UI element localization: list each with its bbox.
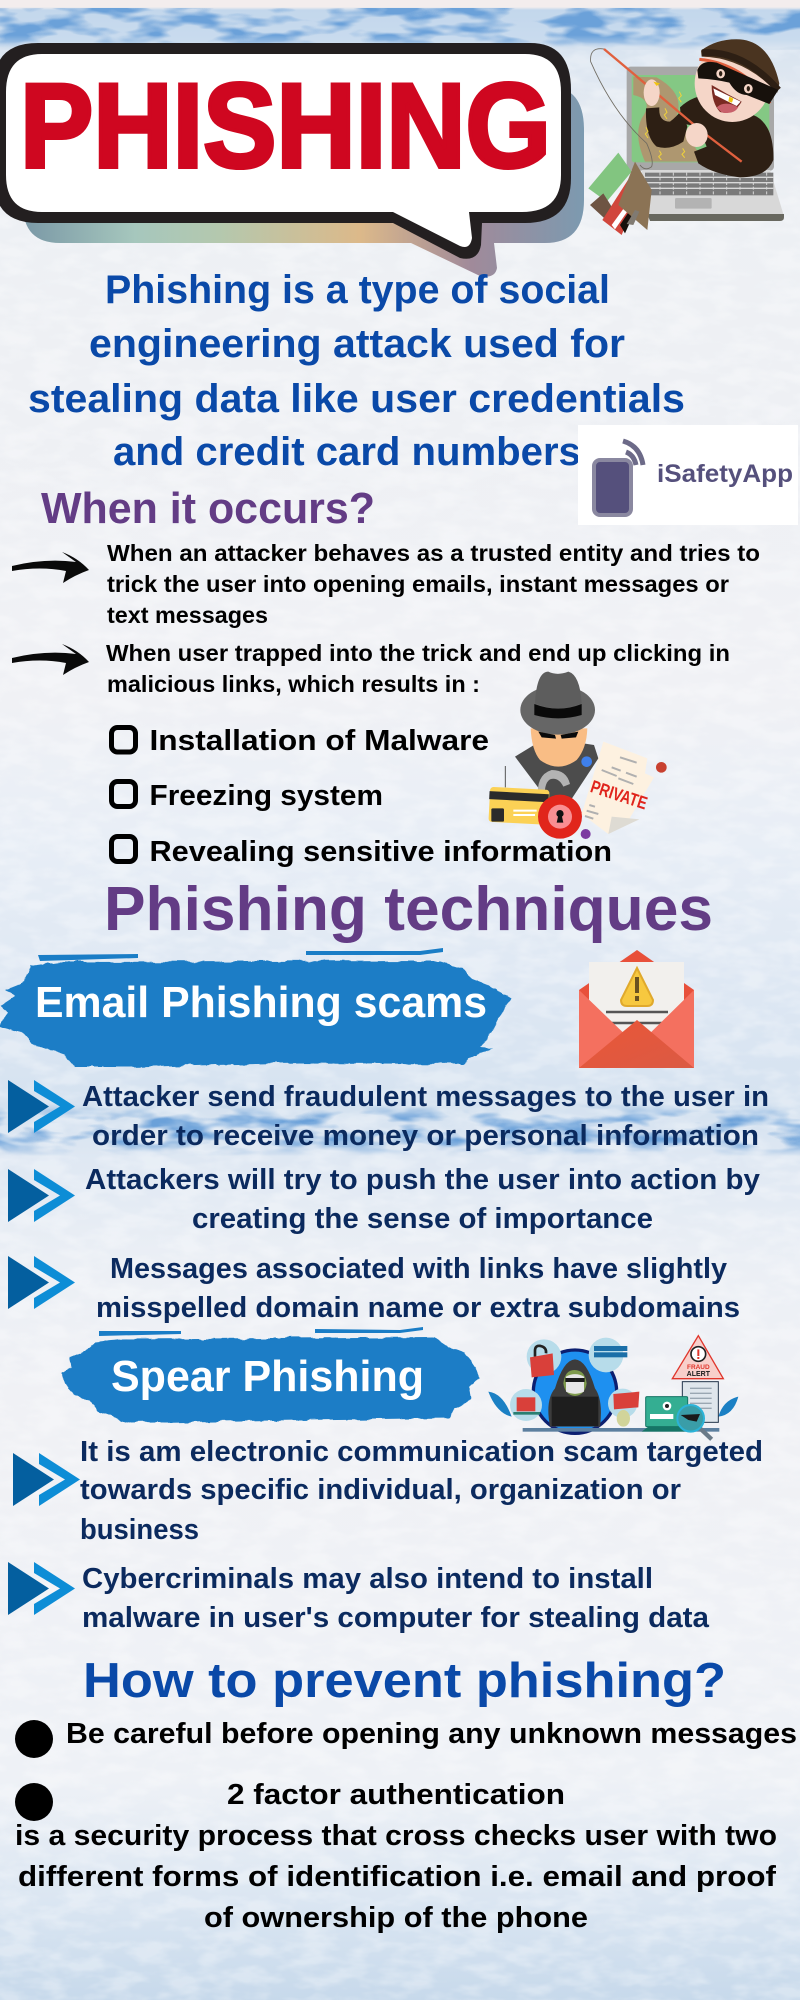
arrow 2 [12,644,89,675]
text [85,1164,760,1235]
text: Be careful before opening any unknown messages [66,1718,797,1750]
checklist of results [112,725,612,868]
text: first occurrence: text messages [107,602,268,628]
icon: double arrow [8,1169,75,1222]
text: misspelled domain name or extra subdomains [96,1292,740,1324]
title speech bubble [0,43,584,277]
logo: iSafetyApp [578,425,798,525]
bubble fill [6,54,561,247]
prevention tip 2 [15,1779,777,1934]
text: of ownership of the phone [204,1902,588,1934]
intro paragraph: and credit card numbers. [113,430,592,474]
arrow 1 [12,552,89,583]
bullet: spear phishing definition [13,1436,763,1546]
text [82,1081,769,1152]
bullet dot [15,1783,53,1821]
heading: How to prevent phishing?: How to prevent phishing? [83,1654,726,1708]
text: business [80,1514,199,1546]
text [15,1779,777,1934]
checklist of results: Revealing sensitive information [150,836,612,868]
text [80,1436,763,1546]
text [96,1253,740,1324]
text: Attackers will try to push the user into action by [85,1164,760,1196]
banner text: Spear Phishing [111,1352,424,1401]
text: first occurrence: trick the user into opening emails, instant messages or [107,571,729,597]
text: 2 factor authentication [227,1779,565,1811]
icon: thief fishing from laptop [588,39,784,235]
text: towards specific individual, organization or [80,1474,681,1506]
heading: Phishing techniques: Phishing techniques [104,875,713,944]
checklist of results: Installation of Malware [150,725,489,757]
icon: spy with private document: PRIVATE [588,776,650,813]
icon: hooded hacker and fraud alert [488,1336,738,1439]
icon: double arrow [8,1080,75,1133]
text: first occurrence [107,540,760,628]
title text: PHISHING [20,59,551,193]
text [82,1563,710,1634]
text: creating the sense of importance [192,1203,653,1235]
icon: phone with signal [594,441,643,515]
icon: double arrow [8,1562,75,1615]
bullet: fraudulent messages [8,1080,769,1152]
intro paragraph: Phishing is a type of social [105,268,610,312]
icon: hooded hacker and fraud alert: ALERT [687,1369,710,1378]
brush stroke background [0,961,510,1067]
text: is a security process that cross checks user with two [15,1820,777,1852]
bullet: misspelled links [8,1253,740,1324]
text: Messages associated with links have slightly [110,1253,727,1285]
text: order to receive money or personal information [92,1120,759,1152]
text: first occurrence: When an attacker behaves as a trusted entity and tries to [107,540,760,566]
text: different forms of identification i.e. email and proof [18,1861,776,1893]
bullet: install malware [8,1562,710,1634]
intro paragraph [28,268,685,474]
text: second occurrence: When user trapped into the trick and end up clicking in [106,640,730,666]
prevention tip 1 [15,1718,797,1758]
checklist of results: Freezing system [150,780,383,812]
icon: double arrow [8,1256,75,1309]
text: second occurrence: malicious links, which results in : [107,671,480,697]
icon: email warning envelope [579,950,694,1068]
intro paragraph: engineering attack used for [89,322,625,366]
bubble outline [0,43,571,259]
bullet dot [15,1720,53,1758]
banner: Email Phishing scams [0,948,510,1067]
text: malware in user's computer for stealing data [82,1602,710,1634]
bullet: sense of importance [8,1164,760,1235]
heading: When it occurs?: When it occurs? [41,484,375,533]
text: It is am electronic communication scam targeted [80,1436,763,1468]
icon: hooded hacker and fraud alert: FRAUD [687,1364,710,1371]
icon: double arrow [13,1453,80,1506]
icon: spy with private document [488,672,667,839]
banner text: Email Phishing scams [35,978,487,1027]
intro paragraph: stealing data like user credentials [28,377,685,421]
text: Cybercriminals may also intend to install [82,1563,653,1595]
logo wordmark: iSafetyApp [657,460,793,488]
bubble gradient shadow [23,87,584,277]
banner: Spear Phishing [60,1327,480,1423]
brush stroke background [60,1337,480,1423]
text: second occurrence [106,640,730,697]
text: Attacker send fraudulent messages to the user in [82,1081,769,1113]
